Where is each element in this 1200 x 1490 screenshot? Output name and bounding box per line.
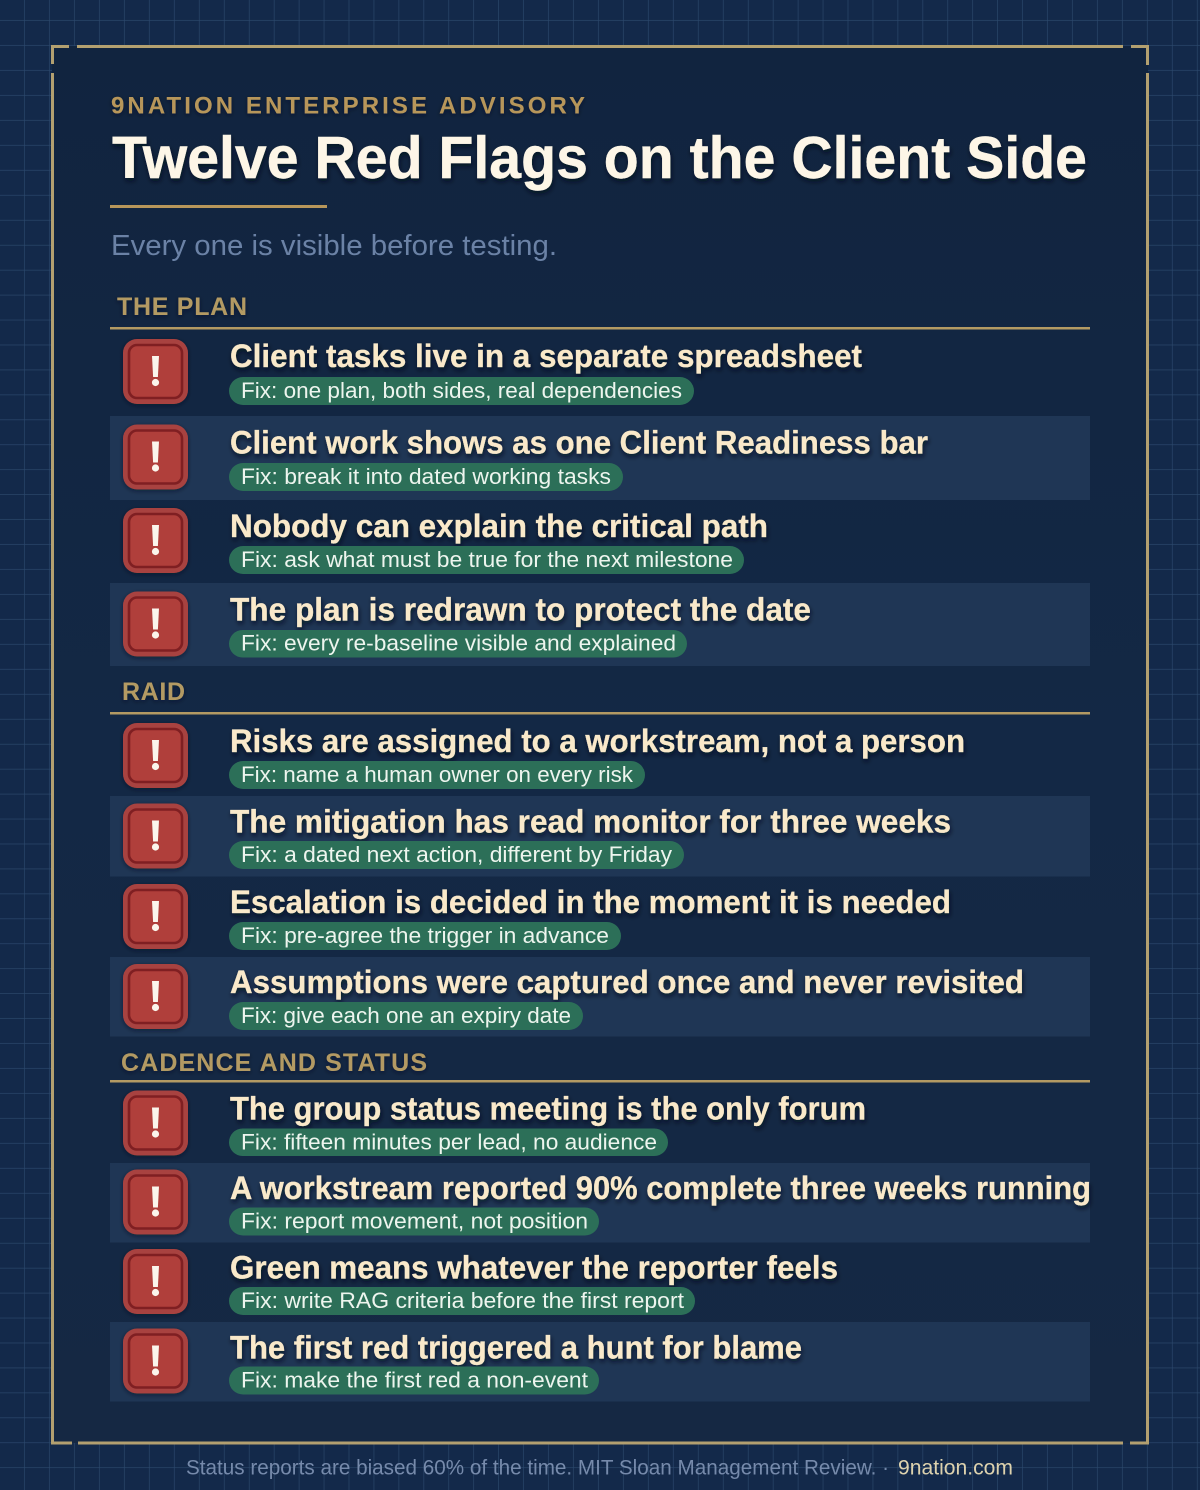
flag 4: Fix: every re-baseline visible and explained [241,630,676,656]
flag 3 [123,508,768,574]
footer: 9nation.com [898,1456,1013,1480]
flag 6: The mitigation has read monitor for three weeks [230,804,951,840]
flag 3: Nobody can explain the critical path [230,508,768,544]
flag 7: Fix: pre-agree the trigger in advance [241,923,609,948]
flag 2: Client work shows as one Client Readiness bar [230,424,928,460]
flag 2 [123,424,928,491]
heading: Cadence and Status: CADENCE AND STATUS [121,1049,427,1077]
flag 3: Fix: ask what must be true for the next milestone [241,547,733,572]
flag 1: Fix: one plan, both sides, real dependencies [241,378,682,403]
divider [110,1080,1090,1082]
flag 10 [123,1170,1091,1236]
title: Twelve Red Flags on the Client Side [112,125,1087,191]
eyebrow: 9NATION ENTERPRISE ADVISORY [111,92,585,120]
flag 11: Green means whatever the reporter feels [230,1250,838,1286]
flag 8: Assumptions were captured once and never revisited [230,964,1024,1000]
flag 7 [123,884,951,950]
flag 4 [123,592,811,658]
flag 6 [123,804,951,869]
flag 5: Fix: name a human owner on every risk [241,762,634,787]
heading: RAID: RAID [122,678,185,706]
section: Cadence and Status [110,1049,1091,1402]
flag 5: Risks are assigned to a workstream, not a person [230,723,965,759]
title rule [110,205,327,208]
flag 4: The plan is redrawn to protect the date [230,592,811,628]
flag 11: Fix: write RAG criteria before the first report [241,1288,684,1313]
flag 9: The group status meeting is the only forum [230,1090,866,1126]
footer: Status reports are biased 60% of the time. MIT Sloan Management Review. · [186,1456,889,1480]
flag 11 [123,1249,838,1315]
flag 8: Fix: give each one an expiry date [241,1003,571,1028]
flag 2: Fix: break it into dated working tasks [241,464,611,489]
subtitle: Every one is visible before testing. [111,230,557,262]
row stripes [110,416,1090,666]
flag 8 [123,964,1024,1030]
flag 12 [123,1328,802,1394]
flag 9 [123,1090,866,1156]
section: RAID [110,678,1090,1036]
heading: The Plan: THE PLAN [117,293,247,321]
flag 1: Client tasks live in a separate spreadsheet [230,338,862,374]
flag 12: Fix: make the first red a non-event [241,1368,588,1392]
flag 7: Escalation is decided in the moment it is needed [230,884,951,920]
flag 1 [123,338,862,405]
flag 12: The first red triggered a hunt for blame [230,1330,802,1366]
flag 10: Fix: report movement, not position [241,1208,588,1234]
divider [110,712,1090,714]
flag 10: A workstream reported 90% complete three weeks running [230,1170,1091,1206]
divider [110,327,1090,330]
flag 9: Fix: fifteen minutes per lead, no audience [241,1130,657,1154]
flag 6: Fix: a dated next action, different by Friday [241,842,672,867]
flag 5 [123,723,965,789]
section: The Plan [110,293,1090,666]
row stripes [110,1163,1090,1402]
row stripes [110,796,1090,1036]
